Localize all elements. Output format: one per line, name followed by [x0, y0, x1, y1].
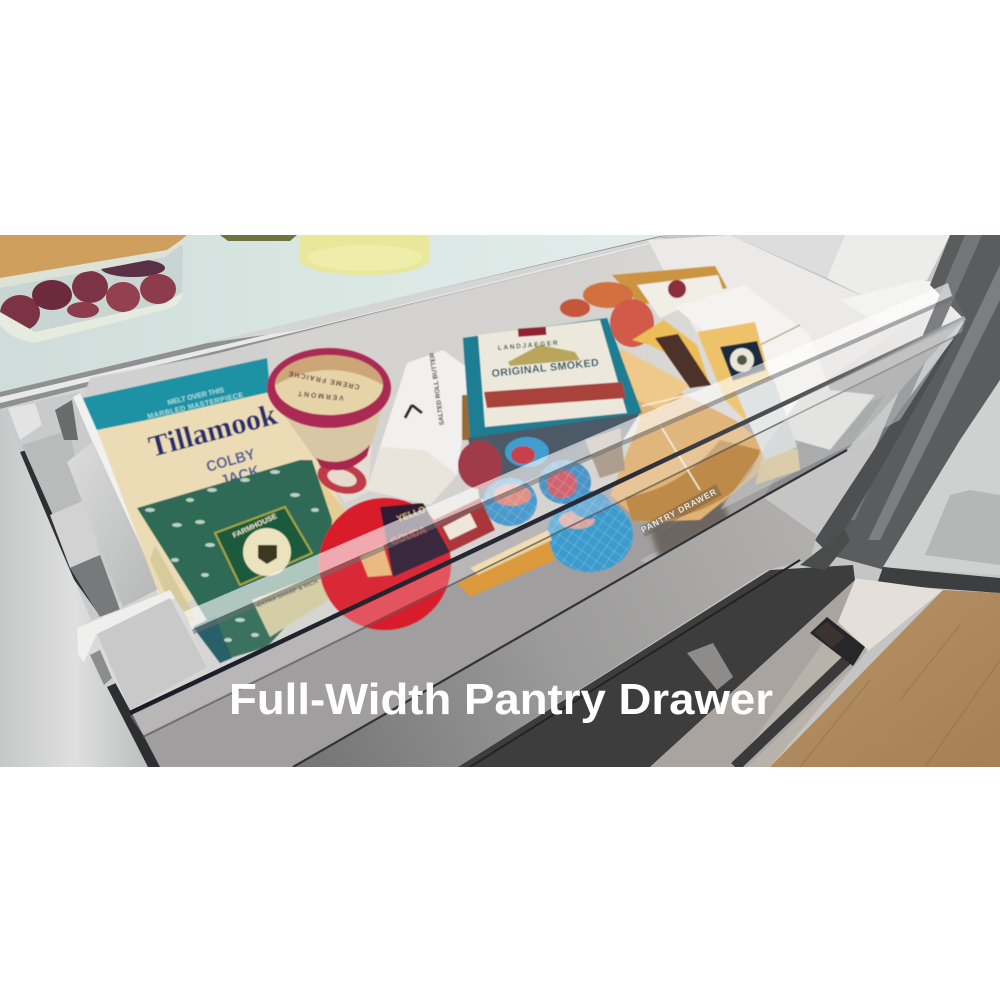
food contents: [83, 266, 875, 663]
stainless door beyond handle: [735, 622, 868, 767]
drawer handle: [735, 617, 865, 767]
second rim lower line: [143, 333, 962, 737]
drawer left side panel: [67, 393, 159, 607]
cream right wedge: [308, 465, 350, 530]
dark drawer edge line: [293, 450, 847, 767]
lower left dark drawer edge: [107, 683, 160, 767]
stainless panel below drawer: [293, 497, 817, 767]
light reflection: [687, 643, 733, 690]
right clear end: [720, 318, 965, 510]
photo base: [0, 235, 1000, 767]
cream panel: [252, 573, 333, 637]
drawer back wall: [0, 240, 965, 713]
left inner drawer rails: [0, 392, 120, 617]
door bottom dark strip: [877, 567, 1000, 593]
Vermont lid text: VERMONT: [297, 389, 344, 401]
clear tint: [100, 288, 965, 713]
Farmhouse label text: FARMHOUSE: [231, 511, 278, 540]
red netted sausages: [560, 282, 654, 347]
Tillamook cheese bag: [83, 345, 348, 610]
open door panel: [877, 380, 1000, 593]
butter label text: SALTED ROLL BUTTER: [429, 352, 446, 426]
red gouda wheel: [319, 498, 451, 630]
second rim dark line: [130, 318, 965, 713]
wood floor: [770, 590, 1000, 767]
back cheese block: [612, 266, 727, 318]
bag slogan upper: MELT OVER THIS: [166, 385, 225, 407]
drawer clear front: [100, 283, 965, 737]
grapes: [0, 259, 176, 331]
Gouda label: GOUDA: [389, 525, 428, 548]
white paper wrap: [675, 285, 875, 450]
net tail: [585, 428, 625, 478]
butter roll: [367, 350, 473, 505]
top rim: [100, 283, 952, 668]
upper right liner panels: [648, 235, 950, 378]
wrapped cheese parcel: [610, 348, 800, 522]
net bag base shadow: [468, 413, 640, 500]
title caption: Full-Width Pantry Drawer: [229, 675, 773, 724]
dark reflection under parcel: [648, 500, 731, 557]
Pantry Drawer label band: [640, 484, 722, 537]
Tillamook wordmark: Tillamook: [145, 398, 281, 464]
translucent view of drawer floor right: [763, 395, 885, 497]
paper label card: [735, 377, 797, 460]
photo: open drawer: [0, 235, 1000, 767]
hinge: [800, 530, 850, 570]
cream cabinet wall: [838, 578, 943, 652]
cheese wedge with dark label: [632, 320, 711, 388]
drawer left corner white tab: [77, 590, 207, 710]
glass shelf: [0, 235, 665, 394]
grape container: [0, 235, 187, 343]
second rim clear band: [130, 321, 965, 735]
Yello label: YELLO: [395, 504, 427, 524]
Creme fraiche lid text: CREME FRAICHE: [288, 369, 360, 390]
Farmhouse label: [215, 507, 312, 585]
chrome shelf edge: [0, 236, 668, 409]
bamboo lid: [0, 235, 187, 282]
infographic: refrigerator pantry drawer scene: [0, 235, 1000, 767]
orange cheese bar: [457, 538, 555, 597]
Extra Sharp label: EXTRA SHARP & RICH: [257, 579, 319, 609]
left cabinet wall: [16, 452, 116, 767]
cream wedge under green bag: [150, 545, 197, 625]
stainless lower door: [650, 580, 855, 767]
bag slogan: MARBLED MASTERPIECE: [146, 390, 244, 421]
top rim shadow line: [104, 296, 953, 673]
wedge base: [760, 448, 800, 478]
lower glass region behind front: [130, 318, 965, 767]
Colby label: COLBY: [204, 446, 257, 476]
dark drawer frame: [458, 565, 855, 767]
Original Smoked label: ORIGINAL SMOKED: [491, 357, 600, 380]
Pantry Drawer engraved label: PANTRY DRAWER: [639, 487, 718, 535]
cheese wedge with round label: [697, 322, 770, 420]
twine: [760, 325, 800, 345]
Landjaeger package: [463, 318, 642, 440]
creme fraiche cup: [267, 348, 391, 503]
yellow cup: [299, 235, 429, 275]
Jack label: JACK: [218, 462, 262, 490]
blue netted sausages: [458, 437, 633, 572]
green Farmhouse bag: [137, 460, 333, 663]
small red and white pack: [430, 498, 495, 552]
jar: [220, 235, 297, 241]
Landjaeger label: LANDJAEGER: [498, 340, 558, 352]
dark door frame right: [815, 235, 1000, 570]
dark frame line: [470, 560, 800, 767]
